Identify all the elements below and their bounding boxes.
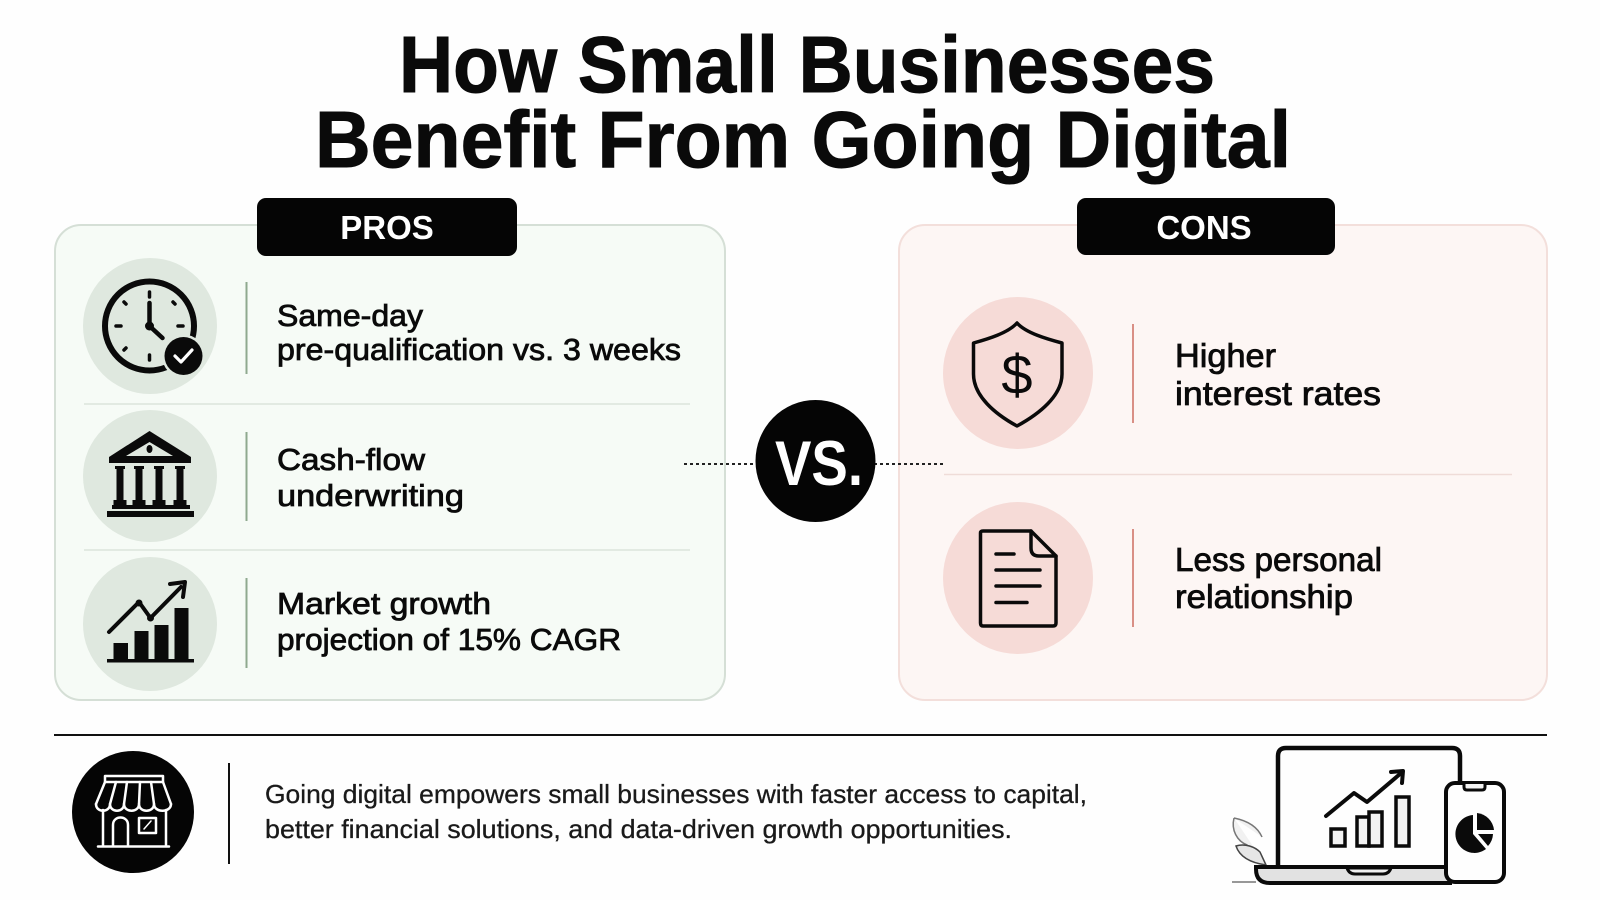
pros text 3 bbox=[277, 586, 621, 657]
icon: bank bbox=[83, 410, 217, 542]
illustration: laptop and phone with charts bbox=[1232, 748, 1504, 883]
leaves bbox=[1233, 818, 1266, 865]
cons text 1 bbox=[1175, 337, 1381, 412]
cons badge: CONS bbox=[1156, 209, 1252, 246]
vs badge with dotted connectors bbox=[684, 400, 943, 522]
footer summary bbox=[72, 751, 1087, 873]
pros text 3: projection of 15% CAGR bbox=[277, 622, 621, 657]
pros badge: PROS bbox=[340, 209, 434, 246]
icon: growth chart bbox=[83, 557, 217, 691]
pros item: same-day pre-qualification bbox=[83, 258, 681, 394]
cons text 2: Less personal bbox=[1175, 541, 1382, 578]
icon: clock with check bbox=[83, 258, 217, 394]
cons item: less personal relationship bbox=[943, 502, 1382, 654]
cons text 1: interest rates bbox=[1175, 375, 1381, 412]
icon: document bbox=[943, 502, 1093, 654]
cons badge bbox=[1077, 198, 1335, 255]
laptop bbox=[1256, 748, 1460, 883]
pros text 1 bbox=[277, 298, 681, 367]
icon: storefront bbox=[72, 751, 194, 873]
title: How Small Businesses bbox=[399, 20, 1215, 109]
cons text 1: Higher bbox=[1175, 337, 1276, 374]
pros text 1: pre-qualification vs. 3 weeks bbox=[277, 332, 681, 367]
icon: shield with dollar bbox=[943, 297, 1093, 449]
panel: pros bbox=[55, 198, 725, 700]
pros text 3: Market growth bbox=[277, 586, 491, 621]
footer text: better financial solutions, and data-driven growth opportunities. bbox=[265, 814, 1012, 844]
laptop chart bbox=[1326, 771, 1409, 846]
cons text 2: relationship bbox=[1175, 578, 1353, 615]
phone pie chart bbox=[1455, 813, 1494, 853]
icon: shield with dollar: $ bbox=[1001, 343, 1033, 406]
pros text 2: underwriting bbox=[277, 478, 464, 513]
pros badge bbox=[257, 198, 517, 256]
pros text 2 bbox=[277, 442, 464, 513]
vs badge with dotted connectors: VS. bbox=[775, 429, 863, 499]
panel: cons bbox=[899, 198, 1547, 700]
footer text bbox=[265, 779, 1087, 844]
pros text 1: Same-day bbox=[277, 298, 424, 333]
title bbox=[315, 20, 1291, 184]
pros text 2: Cash-flow bbox=[277, 442, 426, 477]
phone bbox=[1446, 783, 1504, 882]
footer text: Going digital empowers small businesses with faster access to capital, bbox=[265, 779, 1087, 809]
title: Benefit From Going Digital bbox=[315, 95, 1291, 184]
cons item: higher interest rates bbox=[943, 297, 1381, 449]
pros item: market growth bbox=[83, 557, 621, 691]
pros item: cash-flow underwriting bbox=[83, 410, 464, 542]
cons text 2 bbox=[1175, 541, 1382, 615]
